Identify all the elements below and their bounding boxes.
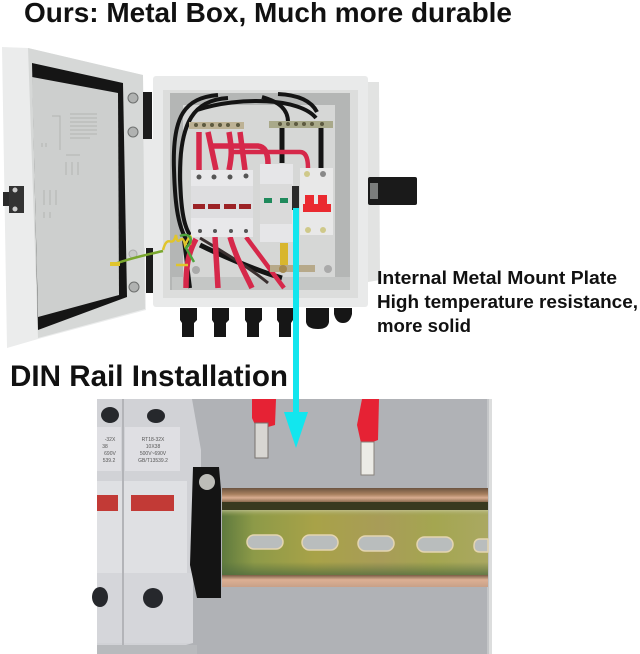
- door bolts: [128, 93, 139, 292]
- red cables: [186, 132, 308, 288]
- heading: DIN rail: DIN Rail Installation: [10, 360, 288, 393]
- callout: mount plate: Internal Metal Mount Plate: [377, 268, 617, 288]
- cyan arrow: [284, 208, 308, 448]
- fuse label text: RT18-32X: [142, 437, 165, 443]
- circuit breaker: [300, 168, 333, 235]
- surge protector: [260, 164, 299, 242]
- door latch: [3, 186, 24, 213]
- photo: DIN rail detail: [92, 399, 492, 654]
- red ferrule right: [357, 399, 379, 475]
- red ferrule left: [252, 399, 276, 458]
- fuse label text: 38: [102, 444, 108, 450]
- fuse label text: 690V: [104, 451, 116, 457]
- callout: mount plate: High temperature resistance,: [377, 292, 638, 312]
- hinges: [143, 92, 154, 293]
- box latch handle: [368, 177, 417, 205]
- black cables: [174, 94, 321, 288]
- fuse label text: -32X: [105, 437, 116, 443]
- fuse label text: 10X38: [146, 444, 160, 450]
- callout: mount plate: more solid: [377, 316, 471, 336]
- enclosure body: [153, 76, 380, 307]
- fuse label text: 500V~690V: [140, 451, 167, 457]
- fuse screws: [92, 407, 165, 608]
- photo: open enclosure: [2, 47, 417, 348]
- fuse holders: [191, 170, 253, 237]
- ground terminal: [192, 243, 332, 274]
- callout: mount plate: [377, 268, 638, 336]
- enclosure door: [2, 47, 146, 348]
- fuse modules: [92, 399, 201, 654]
- rail end clamp: [190, 467, 221, 598]
- ground wire: [110, 235, 194, 266]
- busbars: [189, 121, 333, 129]
- fuse label text: 539.2: [103, 458, 115, 464]
- door wiring diagram: [42, 114, 97, 218]
- cable connectors: [180, 308, 352, 337]
- fuse label text: [102, 437, 168, 464]
- fuse label text: GB/T13539.2: [138, 458, 168, 464]
- fuse indicators: [97, 495, 174, 511]
- rail slots: [247, 535, 488, 552]
- din rail: [222, 488, 488, 587]
